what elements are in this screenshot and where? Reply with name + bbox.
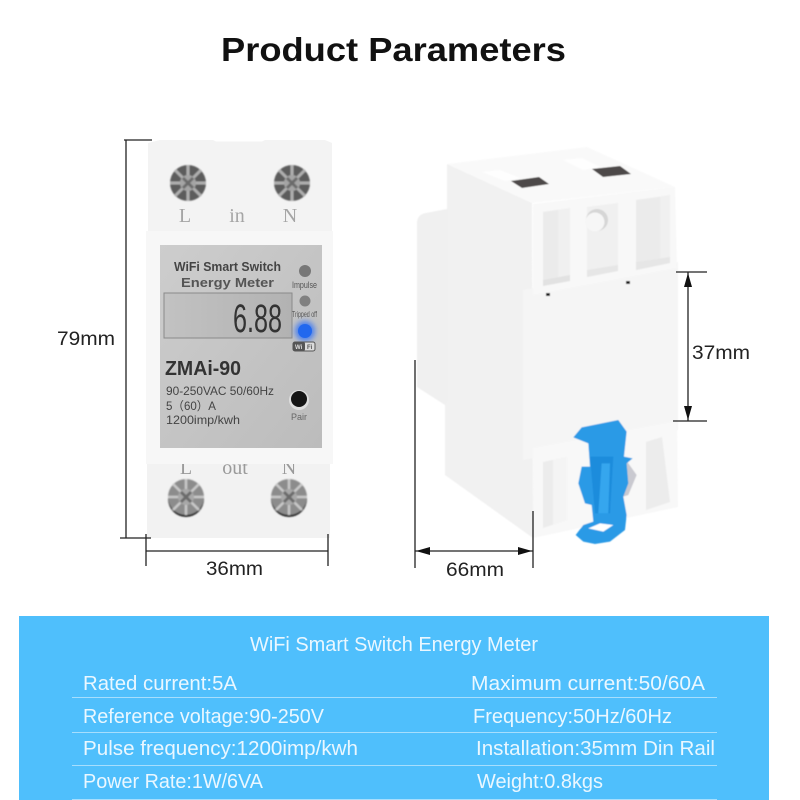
meter specifications: 5（60）A	[166, 399, 216, 413]
model name: ZMAi-90	[165, 358, 241, 380]
panel heading: WiFi Smart Switch Energy Meter	[250, 634, 538, 656]
terminal labels: in: L	[179, 205, 191, 227]
dimension: 79mm height: 79mm	[57, 329, 115, 350]
left specification column: Rated current:5A	[83, 673, 238, 695]
blue DIN rail clip	[573, 420, 637, 544]
right specification column: Installation:35mm Din Rail	[476, 738, 715, 760]
icon: bottom left screw	[168, 479, 204, 517]
upper terminal block front	[533, 187, 677, 296]
dimension: 36mm width	[146, 534, 328, 580]
meter face frame	[146, 231, 333, 464]
meter panel heading: WiFi Smart Switch	[174, 259, 281, 274]
meter specifications	[166, 384, 274, 427]
indicator LEDs: Tripped off	[292, 310, 318, 319]
right specification column: Weight:0.8kgs	[477, 771, 603, 793]
icon: WiFi badge	[293, 342, 315, 351]
grey display panel	[160, 245, 322, 448]
dimension: 79mm height	[57, 140, 152, 538]
icon: top left screw	[170, 165, 206, 201]
left specification column	[83, 673, 358, 793]
top face with terminal slots	[447, 147, 675, 203]
dimension: 66mm depth	[415, 360, 533, 581]
terminal labels: out	[180, 457, 296, 479]
dimension: 36mm width: 36mm	[206, 559, 263, 580]
left specification column: Pulse frequency:1200imp/kwh	[83, 738, 358, 760]
meter specifications: 90-250VAC 50/60Hz	[166, 384, 274, 398]
terminal labels: out: N	[282, 457, 296, 479]
side view of energy meter	[417, 147, 678, 544]
indicator LEDs	[292, 265, 318, 341]
LCD reading: 6.88	[233, 297, 282, 341]
title: Product Parameters	[221, 31, 566, 68]
meter specifications: 1200imp/kwh	[166, 413, 240, 427]
left specification column: Power Rate:1W/6VA	[83, 771, 264, 793]
screw access hole	[586, 209, 608, 231]
meter top terminal block	[148, 140, 332, 232]
right specification column: Maximum current:50/60A	[471, 673, 706, 695]
dimension: 66mm depth: 66mm	[446, 560, 504, 581]
terminal labels: in: in	[229, 205, 245, 227]
terminal labels: in: N	[283, 205, 297, 227]
rear flange	[417, 209, 447, 420]
front view of energy meter	[146, 140, 333, 538]
centre front body	[523, 262, 678, 460]
indicator LEDs: Impulse	[292, 280, 317, 290]
dimension: 37mm terminal spacing	[673, 272, 750, 421]
panel: specifications	[19, 616, 769, 800]
icon: WiFi badge: Fi	[307, 345, 313, 351]
meter bottom terminal block	[147, 457, 330, 538]
right specification column: Frequency:50Hz/60Hz	[473, 706, 672, 728]
lower terminal block	[533, 421, 678, 538]
icon: bottom right screw	[271, 479, 307, 517]
pair button: Pair	[291, 412, 307, 422]
side body	[445, 164, 533, 538]
row dividers	[72, 698, 717, 800]
LCD screen	[164, 293, 292, 341]
icon: top right screw	[274, 165, 310, 201]
right specification column	[471, 673, 715, 793]
terminal labels: out: L	[180, 457, 192, 479]
meter panel heading: Energy Meter	[181, 275, 274, 290]
dimension: 37mm terminal spacing: 37mm	[692, 343, 750, 364]
left specification column: Reference voltage:90-250V	[83, 706, 325, 728]
terminal labels: in	[179, 205, 297, 227]
terminal labels: out: out	[222, 457, 248, 479]
icon: WiFi badge: Wi	[295, 345, 303, 351]
meter panel heading	[174, 259, 281, 290]
pair button	[289, 390, 309, 422]
